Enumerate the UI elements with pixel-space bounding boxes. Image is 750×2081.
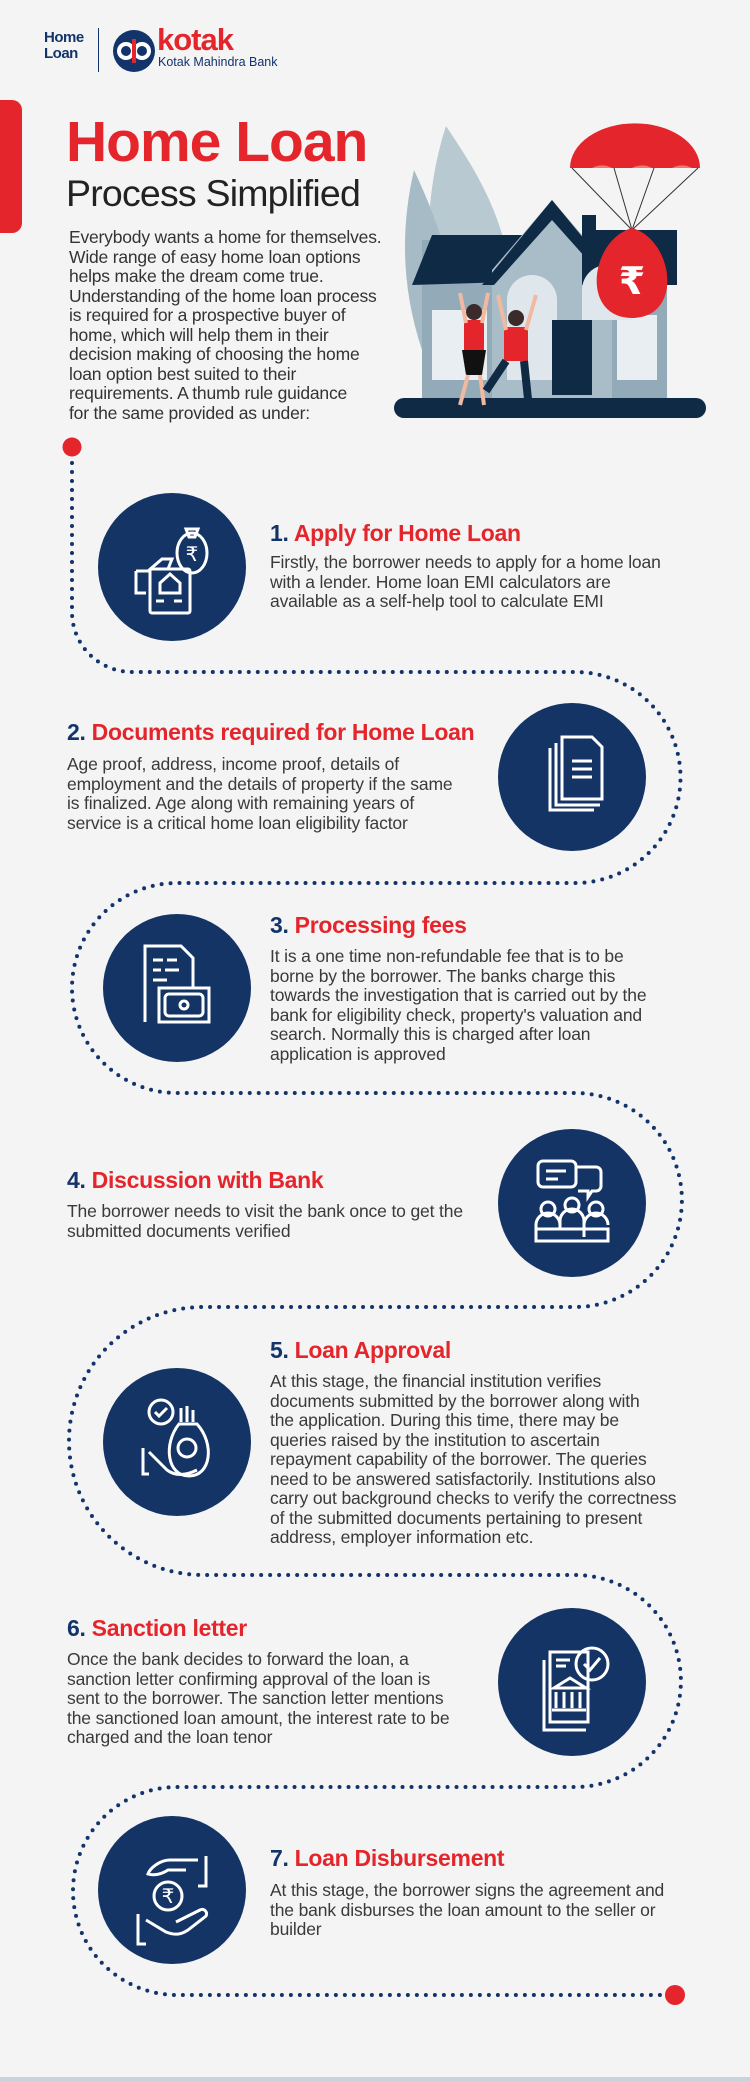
bottom line [0, 2077, 750, 2081]
step 6 [67, 1608, 646, 1756]
logo text: kotak: kotak [157, 22, 233, 57]
heading 6: 6. Sanction letter [67, 1615, 247, 1641]
text 6: sanction letter confirming approval of the loan is [67, 1668, 430, 1688]
text 1: available as a self-help tool to calculate EMI [270, 591, 604, 611]
logo header: Kotak Mahindra Bank [158, 55, 278, 69]
intro paragraph: requirements. A thumb rule guidance [69, 383, 347, 403]
step 3 [103, 912, 646, 1064]
text 6: charged and the loan tenor [67, 1727, 272, 1747]
text 7: the bank disburses the loan amount to the seller or [270, 1900, 655, 1920]
text 2: is finalized. Age along with remaining years of [67, 793, 414, 813]
text 3 [270, 946, 646, 1064]
title: Home Loan [66, 110, 367, 174]
title: Process Simplified [66, 172, 360, 214]
house illustration [394, 123, 706, 418]
house illustration: ₹ [619, 261, 645, 303]
text 5 [270, 1371, 676, 1547]
text 5: the application. During this time, there may be [270, 1410, 619, 1430]
text 6: sent to the borrower. The sanction letter mentions [67, 1688, 443, 1708]
intro paragraph: Understanding of the home loan process [69, 286, 377, 306]
text 4: submitted documents verified [67, 1220, 290, 1240]
heading 2: 2. Documents required for Home Loan [67, 719, 474, 745]
logo text: Home Loan: Loan [44, 45, 78, 62]
text 2: Age proof, address, income proof, details of [67, 754, 399, 774]
intro paragraph: Everybody wants a home for themselves. [69, 227, 381, 247]
icon: processing fees [103, 914, 251, 1062]
text 5: of the submitted documents pertaining to present [270, 1508, 642, 1528]
text 1 [270, 552, 661, 611]
text 7 [270, 1880, 664, 1939]
text 2: employment and the details of property if the same [67, 774, 452, 794]
text 6 [67, 1649, 449, 1747]
text 5: At this stage, the financial institution verifies [270, 1371, 601, 1391]
text 3: search. Normally this is charged after loan [270, 1024, 590, 1044]
icon: discussion [498, 1129, 646, 1277]
text 1: with a lender. Home loan EMI calculators are [270, 572, 611, 592]
step 5 [103, 1337, 676, 1547]
icon: loan approval [103, 1368, 251, 1516]
heading 3: 3. Processing fees [270, 912, 467, 938]
intro paragraph: Wide range of easy home loan options [69, 246, 360, 266]
text 3: bank for eligibility check, property's valuation and [270, 1004, 642, 1024]
icon: loan disbursement: ₹ [162, 1884, 174, 1908]
heading 7: 7. Loan Disbursement [270, 1845, 504, 1871]
text 6: Once the bank decides to forward the loan, a [67, 1649, 409, 1669]
icon: documents [498, 703, 646, 851]
text 3: It is a one time non-refundable fee that is to be [270, 946, 624, 966]
intro paragraph: helps make the dream come true. [69, 266, 323, 286]
intro paragraph: loan option best suited to their [69, 364, 296, 384]
step 1 [98, 493, 661, 641]
step 7 [98, 1816, 664, 1964]
text 7: At this stage, the borrower signs the agreement and [270, 1880, 664, 1900]
text 5: need to be answered satisfactorily. Institutions also [270, 1468, 656, 1488]
text 5: carry out background checks to verify the correctness [270, 1488, 676, 1508]
text 3: application is approved [270, 1044, 446, 1064]
text 5: documents submitted by the borrower along with [270, 1390, 640, 1410]
parachute [570, 123, 700, 168]
text 5: address, employer information etc. [270, 1527, 533, 1547]
intro paragraph [69, 227, 381, 422]
text 2: service is a critical home loan eligibility factor [67, 812, 408, 832]
icon: kotak logo [113, 30, 155, 72]
heading 4: 4. Discussion with Bank [67, 1167, 323, 1193]
people [466, 304, 482, 320]
icon: apply for loan [98, 493, 246, 641]
heading 5: 5. Loan Approval [270, 1337, 451, 1363]
intro paragraph: is required for a prospective buyer of [69, 305, 345, 325]
title [66, 110, 367, 214]
red side tab [0, 100, 22, 233]
text 7: builder [270, 1919, 321, 1939]
step 2 [67, 703, 646, 851]
icon: apply for loan: ₹ [186, 542, 198, 566]
icon: loan disbursement [98, 1816, 246, 1964]
text 5: repayment capability of the borrower. The queries [270, 1449, 647, 1469]
intro paragraph: decision making of choosing the home [69, 344, 359, 364]
text 6: the sanctioned loan amount, the interest rate to be [67, 1708, 449, 1728]
text 4 [67, 1201, 463, 1240]
icon: sanction letter [498, 1608, 646, 1756]
logo text: Home Loan: Home [44, 29, 84, 46]
heading 1: 1. Apply for Home Loan [270, 520, 521, 546]
intro paragraph: for the same provided as under: [69, 402, 310, 422]
step 4 [67, 1129, 646, 1277]
logo header [44, 22, 278, 72]
logo text: Home Loan [44, 29, 84, 62]
text 2 [67, 754, 452, 832]
text 5: queries raised by the institution to ascertain [270, 1430, 600, 1450]
intro paragraph: home, which will help them in their [69, 324, 329, 344]
text 1: Firstly, the borrower needs to apply for a home loan [270, 552, 661, 572]
text 3: towards the investigation that is carried out by the [270, 985, 646, 1005]
text 3: borne by the borrower. The banks charge this [270, 966, 615, 986]
text 4: The borrower needs to visit the bank once to get the [67, 1201, 463, 1221]
